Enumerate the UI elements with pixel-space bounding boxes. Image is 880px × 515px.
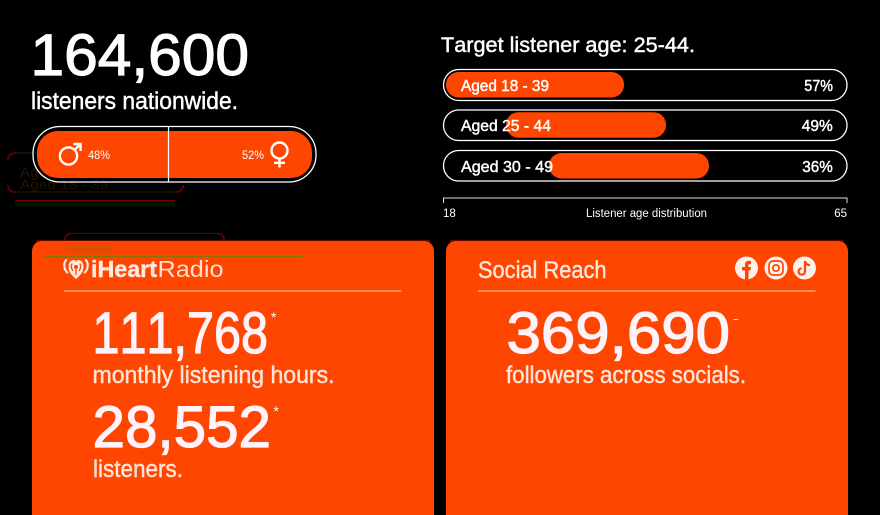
bar: aged 25-44 <box>444 110 847 140</box>
headline: nationwide listeners <box>30 23 249 115</box>
bar: aged 18-39: Aged 18 - 39 <box>461 78 549 95</box>
bar: aged 25-44: Aged 25 - 44 <box>461 118 551 135</box>
male share: 48% <box>88 150 110 162</box>
panel: gender split <box>33 126 316 182</box>
stat: monthly listening hours <box>92 301 334 389</box>
female share: 52% <box>242 150 264 162</box>
axis: age range: Listener age distribution <box>586 208 707 220</box>
bar: aged 30-49: Aged 30 - 49 <box>461 159 553 176</box>
bar: aged 25-44: 49% <box>802 118 833 135</box>
stat: listeners: * <box>274 403 280 419</box>
bar: aged 18-39 <box>444 70 847 100</box>
stat: followers across socials: 369,690 <box>506 301 730 366</box>
text: Aged 18 - 39 <box>20 164 108 180</box>
axis: age range: 18 <box>443 208 456 220</box>
icon: iHeartRadio heart logo <box>64 260 88 279</box>
bar chart: listener age distribution <box>443 70 847 220</box>
stat: monthly listening hours: 111,768 <box>92 301 268 366</box>
bar: aged 18-39: 57% <box>804 78 833 95</box>
axis: age range: 65 <box>834 208 847 220</box>
axis: age range <box>443 198 847 220</box>
headline: nationwide listeners: 164,600 <box>30 23 249 88</box>
bar: aged 30-49: 36% <box>802 159 833 176</box>
headline: nationwide listeners: listeners nationwide. <box>31 88 238 115</box>
icon: male symbol <box>60 144 80 165</box>
icon: female symbol <box>272 142 288 168</box>
logo wordmark <box>91 256 224 282</box>
stat: listeners: 28,552 <box>92 395 271 460</box>
logo wordmark: Radio <box>158 256 224 282</box>
icon: facebook <box>735 256 758 280</box>
icon: tiktok <box>793 256 816 280</box>
panel: social reach <box>446 241 848 515</box>
heading: social reach: Social Reach <box>478 257 606 284</box>
heading: target listener age: Target listener age: 25-44. <box>441 33 695 57</box>
panel: iHeartRadio <box>32 241 434 515</box>
stat: followers across socials: ~ <box>733 315 739 326</box>
icon: instagram <box>764 256 788 280</box>
stat: followers across socials <box>506 301 746 389</box>
logo wordmark: iHeart <box>91 256 157 282</box>
bar: aged 30-49 <box>444 150 847 181</box>
stat: monthly listening hours: monthly listening hours. <box>92 362 334 389</box>
text: Aged 18 - 39 <box>20 177 108 192</box>
stat: listeners: listeners. <box>93 456 183 483</box>
stat: followers across socials: followers across socials. <box>506 362 746 389</box>
stat: monthly listening hours: * <box>271 309 277 325</box>
